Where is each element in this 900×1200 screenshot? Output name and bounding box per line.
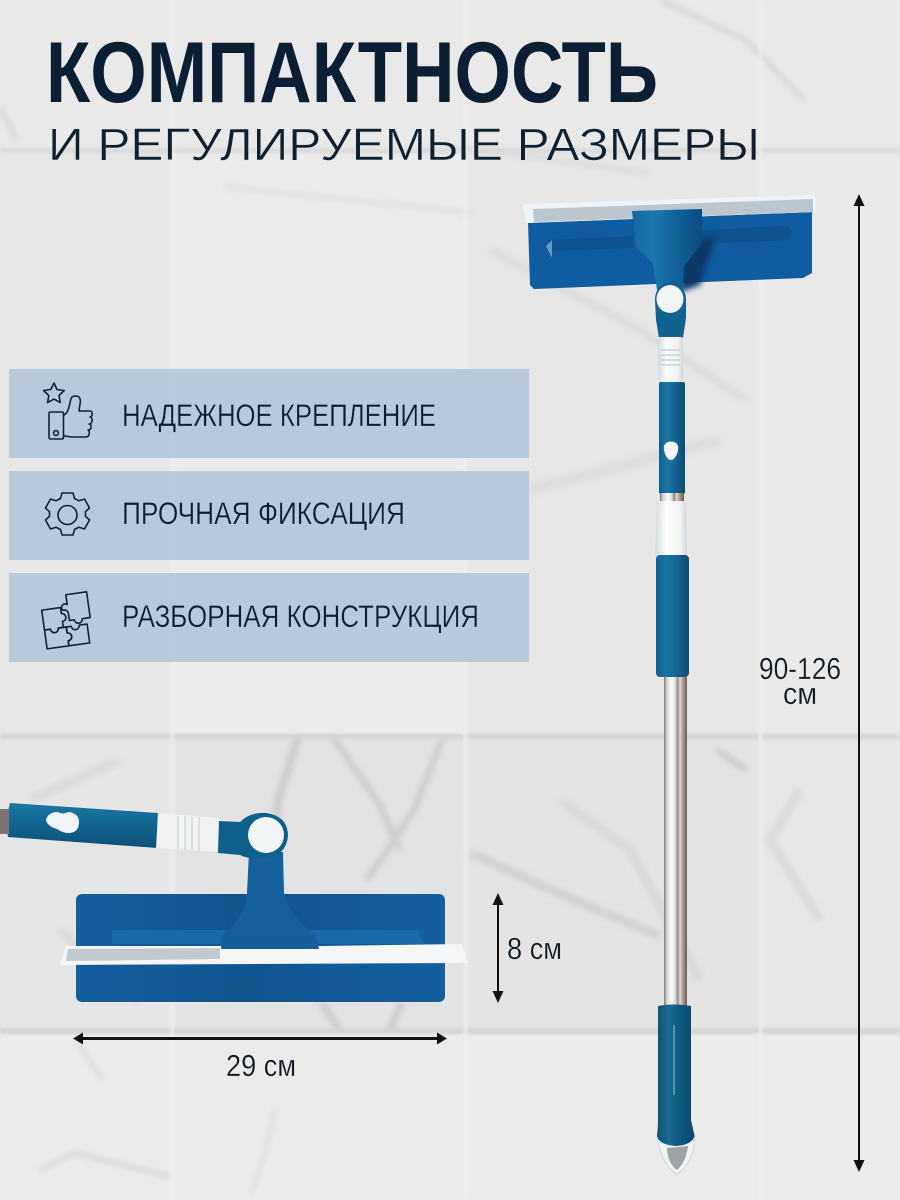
lower grip (657, 1004, 694, 1146)
upper tube (659, 382, 685, 494)
arrow: head width (73, 1032, 447, 1044)
icon: gear (46, 493, 90, 535)
title: КОМПАКТНОСТЬ (46, 25, 658, 121)
neck (632, 209, 702, 290)
label: head height: 8 см (507, 931, 562, 966)
lower white collar (655, 501, 687, 555)
metal stub (0, 809, 9, 834)
label: ПРОЧНАЯ ФИКСАЦИЯ (122, 495, 405, 531)
button (46, 812, 79, 833)
icon: puzzle (40, 592, 94, 649)
pad (528, 212, 812, 289)
arrow: head height (492, 893, 504, 1003)
handle (7, 803, 158, 848)
arrow: total length (854, 194, 864, 1172)
icon: thumbs up with star (44, 383, 92, 439)
metal tube (664, 677, 687, 1007)
label: НАДЕЖНОЕ КРЕПЛЕНИЕ (122, 397, 436, 433)
panel: feature 2 (9, 471, 529, 560)
middle tube (656, 555, 689, 677)
neck (221, 852, 319, 948)
label: length: 90-126 (759, 651, 841, 686)
neck base over blade (221, 935, 319, 949)
panel: feature 3 (9, 573, 529, 662)
white collar (156, 813, 219, 852)
metal collar (660, 493, 684, 501)
pad (76, 894, 445, 1002)
blade (523, 195, 816, 223)
pivot (218, 813, 288, 859)
label: head width: 29 см (226, 1048, 296, 1083)
panel: feature 1 (9, 369, 529, 458)
subtitle: И РЕГУЛИРУЕМЫЕ РАЗМЕРЫ (48, 119, 760, 170)
product: full-length squeegee (523, 195, 816, 1174)
label: length (759, 651, 841, 711)
blade (60, 944, 468, 965)
product: squeegee head close-up (0, 803, 468, 1002)
button (664, 442, 678, 460)
label: length: см (783, 676, 817, 711)
end cap (657, 1134, 695, 1174)
white collar (658, 337, 683, 382)
label: РАЗБОРНАЯ КОНСТРУКЦИЯ (122, 598, 479, 634)
pivot (655, 282, 686, 338)
